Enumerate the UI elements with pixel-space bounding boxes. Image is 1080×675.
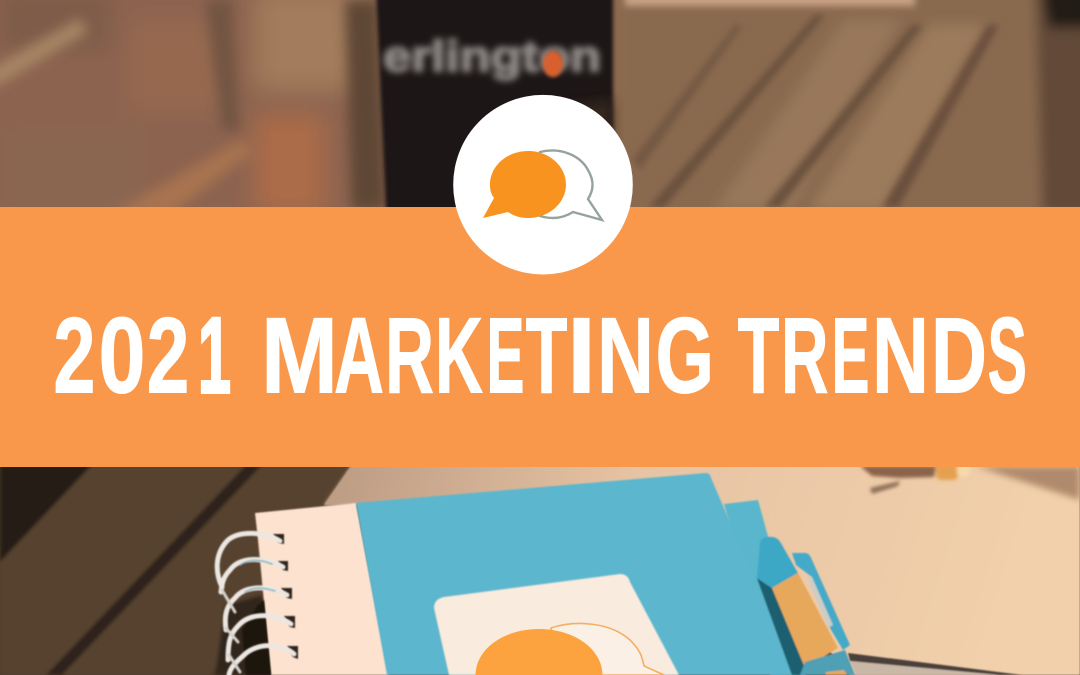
title: T	[526, 294, 567, 416]
table plank gaps	[625, 0, 999, 208]
spiral rings	[217, 533, 294, 675]
orange title banner	[0, 207, 1080, 467]
title: S	[988, 294, 1027, 416]
tan area behind notebook	[324, 466, 800, 560]
title: T	[738, 294, 779, 416]
dark device at lower right	[848, 653, 1022, 675]
brick wall	[0, 0, 390, 230]
wood table	[612, 0, 1080, 220]
dark gap under rings	[242, 600, 271, 675]
photo: blurred brick wall, wood table and mug	[0, 0, 1080, 230]
title: R	[385, 294, 434, 416]
title: 2	[147, 294, 189, 416]
photo: desk with notebook	[0, 464, 1080, 675]
notebook peach spine	[255, 503, 389, 675]
title: D	[931, 294, 987, 416]
icon: orange speech bubble	[483, 151, 566, 218]
title: A	[334, 294, 384, 416]
peach desk surface	[324, 466, 1080, 675]
title: E	[486, 294, 524, 416]
wood planks	[0, 465, 360, 675]
title: N	[872, 294, 929, 416]
notebook back cover	[724, 500, 806, 675]
title: I	[567, 294, 596, 416]
label logo: orange bubble	[476, 629, 602, 675]
brick mortar lines	[0, 0, 386, 215]
pen	[757, 537, 855, 675]
logo badge	[453, 95, 633, 274]
hand blur at top right	[860, 464, 970, 494]
mug with blurred wordmark: erlington	[383, 32, 601, 81]
title: E	[832, 294, 870, 416]
binding holes	[273, 534, 298, 659]
title: G	[656, 294, 714, 416]
title: 0	[98, 294, 146, 416]
blurred corner of top right	[975, 466, 1080, 500]
mug with blurred wordmark	[376, 0, 613, 212]
title: K	[435, 294, 483, 416]
label logo: outline bubble	[551, 624, 664, 675]
title: M	[261, 294, 338, 416]
cover label	[434, 574, 679, 675]
title: R	[781, 294, 828, 416]
title: N	[597, 294, 654, 416]
title: 1	[198, 294, 231, 416]
title: 2	[53, 294, 96, 416]
notebook blue cover	[356, 473, 796, 675]
icon: grey outline speech bubble	[540, 151, 602, 220]
